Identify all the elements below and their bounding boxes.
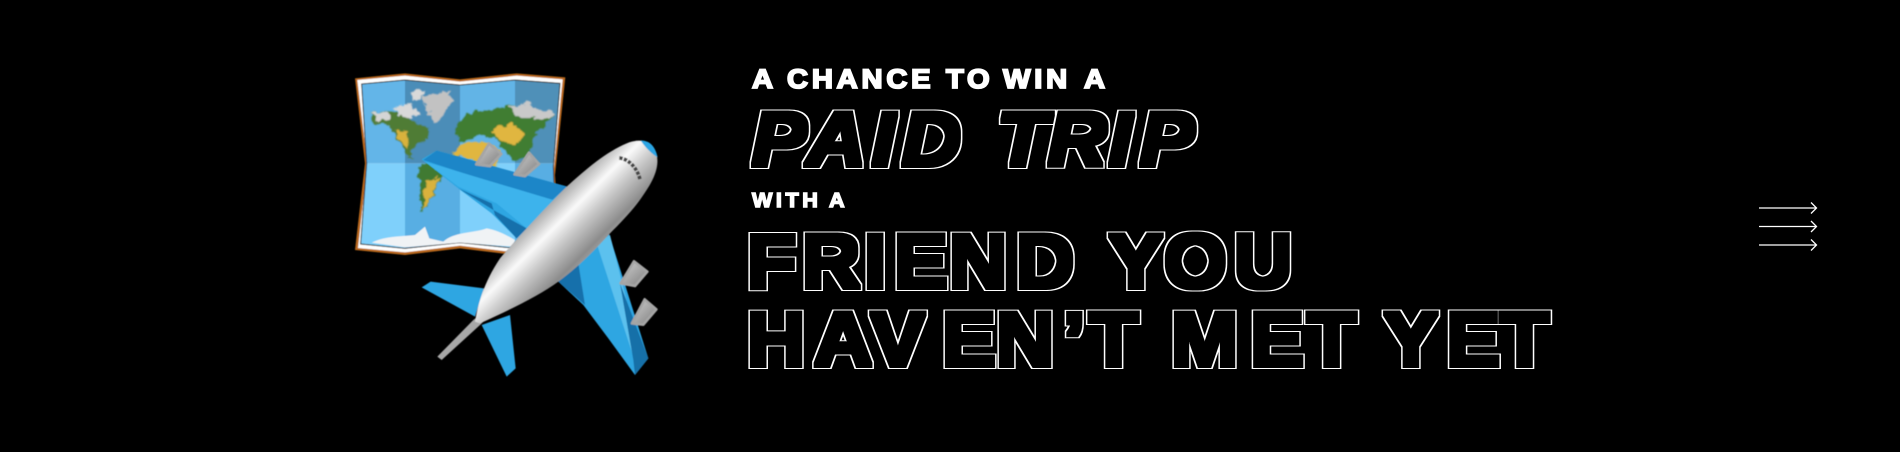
icon: airplane [422,140,658,377]
tailplanes [422,282,516,377]
text: a chance to win a: CHANCE [787,64,934,94]
text: a chance to win a: A [1084,64,1109,94]
map border [355,73,565,255]
icon: folded world map [355,73,565,255]
heading: friend you: FRIEND YOU [747,218,1292,304]
heading: paid trip: PAID TRIP [752,97,1195,182]
text: a chance to win a: TO [946,64,993,94]
map sea panels [361,80,560,248]
upper wing [422,151,567,238]
tail spike [437,295,507,360]
fuselage [475,141,657,323]
heading: haven't met yet: HAVEN’T MET YET [747,296,1549,382]
text: a chance to win a: A [752,64,777,94]
cockpit windows [619,158,640,179]
text: with a: A [829,190,848,212]
lower wing [558,232,648,375]
continents [372,90,555,214]
icon: triple arrows [1759,202,1816,250]
text: with a: WITH [752,190,821,212]
engines [476,144,656,325]
nose tip [641,140,658,157]
clouds [372,227,515,247]
text: a chance to win a: WIN [1003,64,1071,94]
